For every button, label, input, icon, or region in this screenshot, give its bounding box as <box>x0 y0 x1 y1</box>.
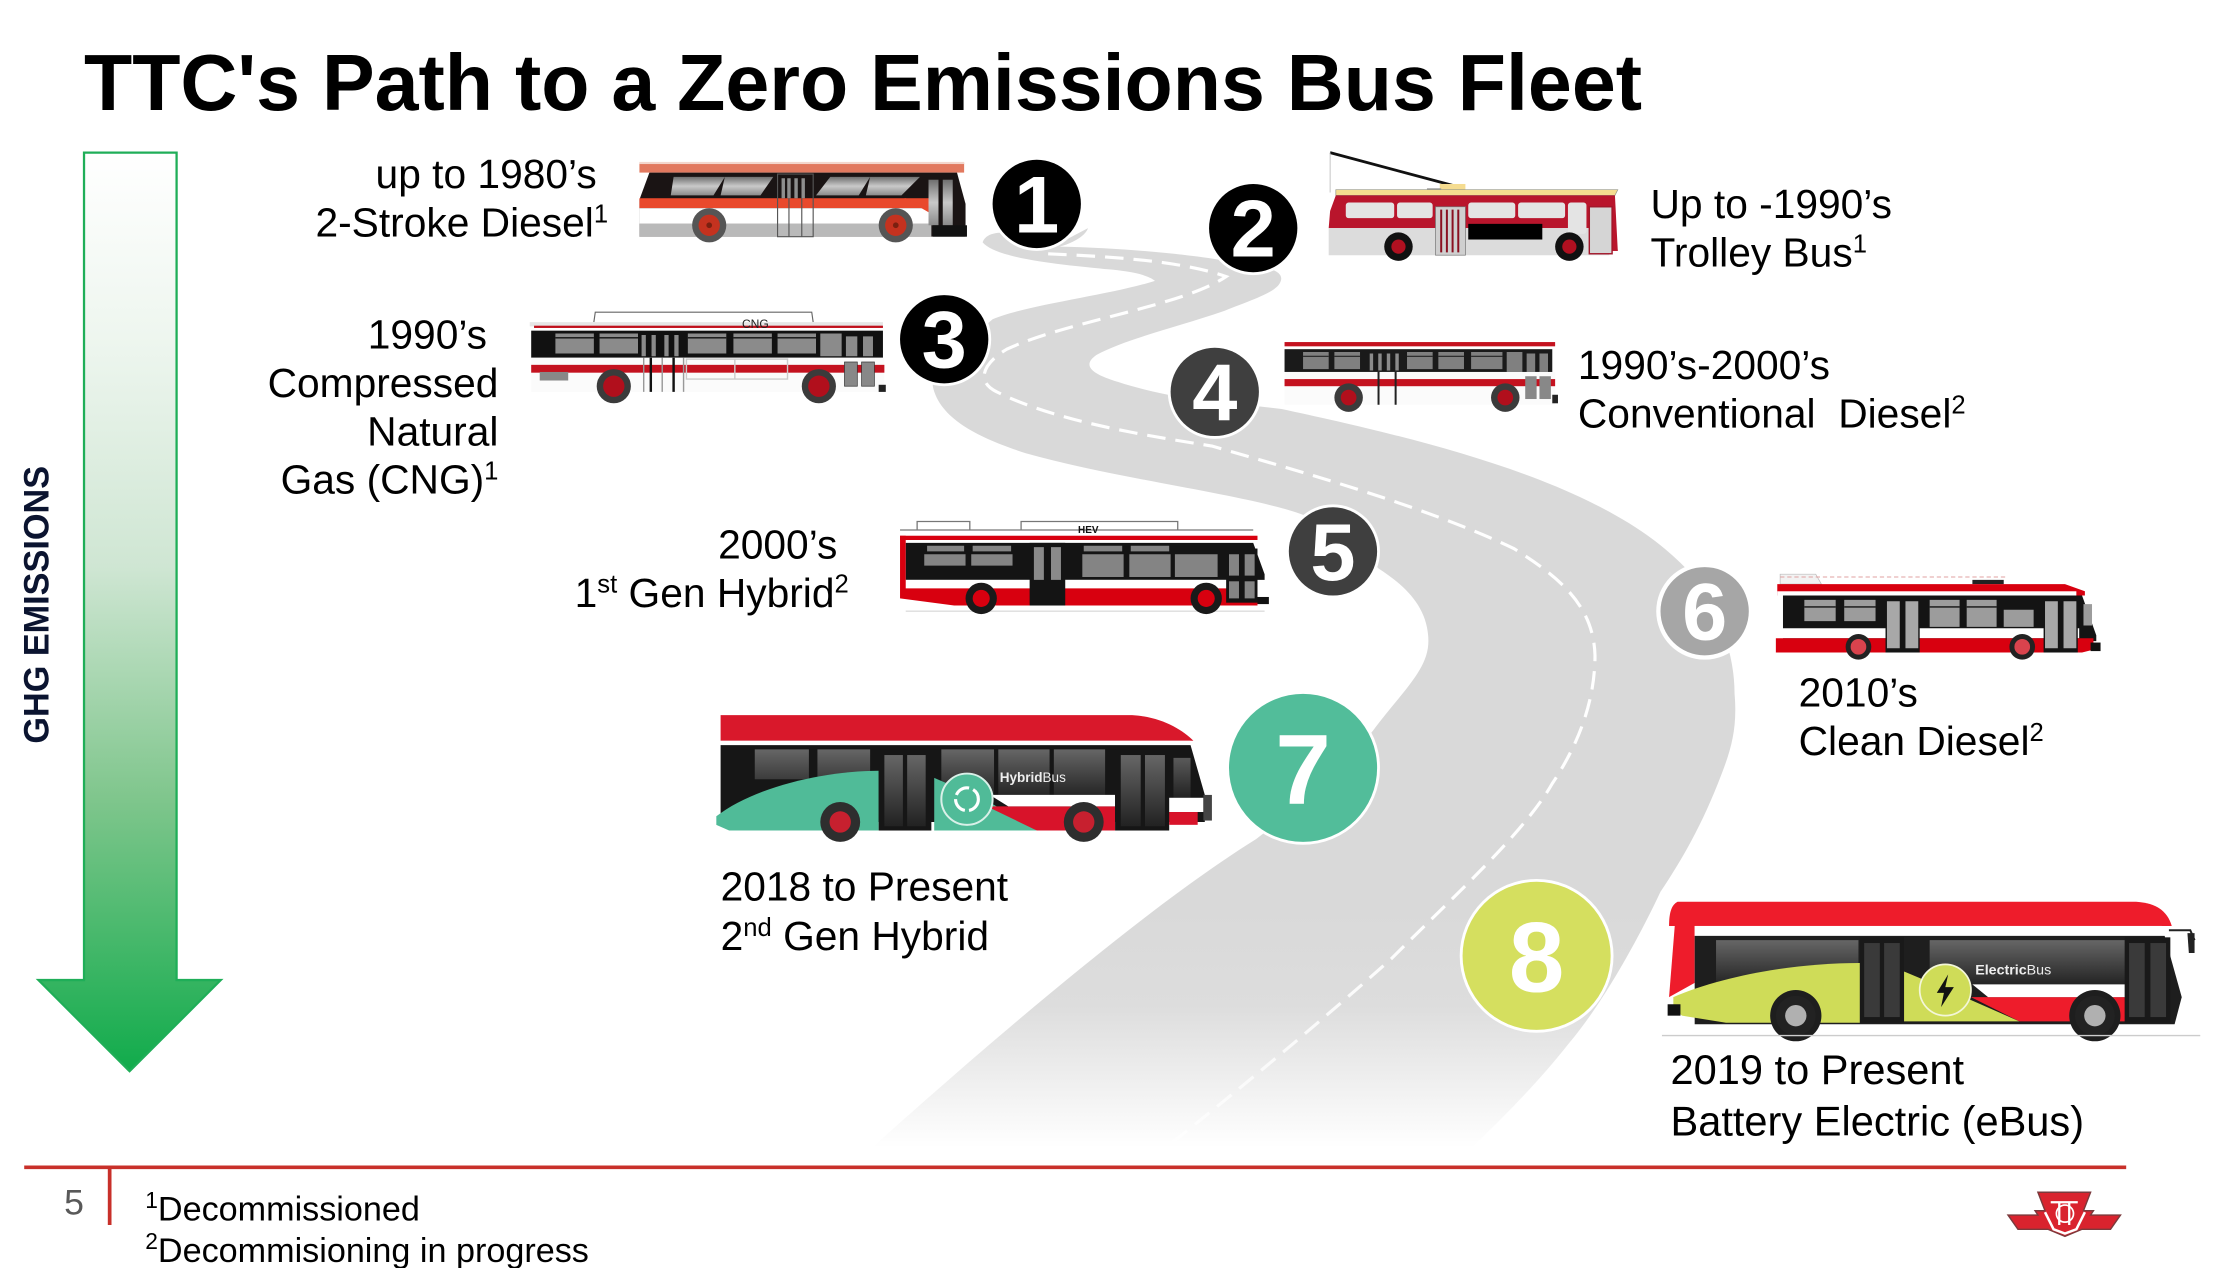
footnotes: 1 <box>145 1187 158 1213</box>
marker 5 <box>1286 504 1380 598</box>
marker 3 <box>897 292 991 386</box>
label: 1990's CNG: 1 <box>484 457 498 485</box>
marker 1 <box>990 157 1084 251</box>
marker 8 <box>1460 879 1614 1033</box>
label: 1990's-2000's conventional diesel: Conventional Diesel <box>1578 391 1951 437</box>
marker 4 <box>1168 345 1262 439</box>
footnotes: 2 <box>145 1228 158 1254</box>
vehicle wordmark: ElectricBus: ElectricBus <box>1975 962 2051 978</box>
marker 1: 1 <box>1014 160 1059 250</box>
logo: TTC <box>2008 1192 2120 1236</box>
label: 2010's clean diesel: 2 <box>2030 719 2044 747</box>
label: up to 1990's trolley <box>1651 181 1892 276</box>
label: 2019 to present battery electric <box>1670 1046 2084 1144</box>
label: 2018 to present second gen hybrid <box>721 863 1009 959</box>
label: 1990's-2000's conventional diesel <box>1578 342 1966 437</box>
bus 2: trolley bus <box>1329 153 1618 261</box>
label: up to 1980's: 2-Stroke Diesel <box>315 200 594 246</box>
label: 2000's first gen hybrid: st <box>597 571 617 599</box>
label: 2010's clean diesel: 2010’s <box>1799 670 1918 716</box>
footer rule <box>24 1167 2126 1225</box>
bus 5: first generation hybrid <box>900 521 1269 614</box>
vehicle wordmark: HybridBus: HybridBus <box>1000 770 1066 785</box>
bus 7: second generation hybrid <box>716 715 1212 842</box>
label: HEV: HEV <box>1078 525 1099 536</box>
label: 1990's-2000's conventional diesel: 1990’s-2000’s <box>1578 342 1830 388</box>
bus 1: 2-stroke diesel <box>639 162 967 242</box>
label: 1990's CNG: 1990’s <box>368 311 487 357</box>
label: up to 1990's trolley: 1 <box>1853 230 1867 258</box>
marker 4: 4 <box>1192 348 1237 438</box>
label: 2018 to present second gen hybrid: nd <box>743 914 772 942</box>
footnotes <box>145 1187 589 1268</box>
label: 2000's first gen hybrid: 2000’s <box>718 522 837 568</box>
marker 5: 5 <box>1310 508 1356 598</box>
label: 2018 to present second gen hybrid: 2 <box>721 913 743 959</box>
marker 2 <box>1206 181 1300 275</box>
label: up to 1980's <box>315 151 608 246</box>
label: 2019 to present battery electric: 2019 to Present <box>1670 1046 1964 1093</box>
axis label: GHG emissions: GHG EMISSIONS <box>17 466 56 744</box>
label: 2018 to present second gen hybrid: 2018 to Present <box>721 863 1009 909</box>
marker 3: 3 <box>922 296 967 386</box>
bus 8: battery electric <box>1661 892 2202 1043</box>
label: 2010's clean diesel: Clean Diesel <box>1799 718 2030 764</box>
label: 2000's first gen hybrid: 2 <box>835 571 849 599</box>
label: 2010's clean diesel <box>1799 670 2044 764</box>
marker 7: 7 <box>1275 714 1331 825</box>
marker 7 <box>1226 691 1380 845</box>
label: up to 1980's: up to 1980’s <box>376 151 597 197</box>
bus 6: clean diesel <box>1776 574 2101 660</box>
label: 1990's CNG <box>268 311 498 503</box>
label: 2000's first gen hybrid: Gen Hybrid <box>617 570 835 616</box>
label: 1990's CNG: Compressed <box>268 360 498 406</box>
road <box>872 228 1735 1148</box>
arrow: GHG emissions decreasing <box>38 153 221 1071</box>
label: up to 1990's trolley: Trolley Bus <box>1651 230 1853 276</box>
label: 2000's first gen hybrid <box>575 522 849 616</box>
marker 2: 2 <box>1231 185 1276 275</box>
bus 4: conventional diesel <box>1285 342 1558 412</box>
label: 2019 to present battery electric: Battery Electric (eBus) <box>1670 1097 2084 1144</box>
label: 1990's CNG: Gas (CNG) <box>281 457 484 503</box>
label: up to 1980's: 1 <box>594 200 608 228</box>
label: 1990's-2000's conventional diesel: 2 <box>1951 391 1966 419</box>
footnotes: Decommissioned <box>158 1191 420 1229</box>
marker 8: 8 <box>1509 902 1564 1013</box>
label: CNG: CNG <box>742 317 769 331</box>
label: 2000's first gen hybrid: 1 <box>575 570 597 616</box>
marker 6: 6 <box>1682 568 1727 658</box>
marker 6 <box>1656 563 1753 660</box>
label: up to 1990's trolley: Up to -1990’s <box>1651 181 1892 227</box>
icon: lightning bolt <box>1937 974 1954 1007</box>
bus 3: CNG <box>530 312 886 403</box>
title: TTC's Path to a Zero Emissions Bus Fleet <box>84 38 1642 127</box>
label: 1990's CNG: Natural <box>367 408 498 454</box>
page number: 5 <box>64 1182 84 1222</box>
label: 2018 to present second gen hybrid: Gen Hybrid <box>772 913 989 959</box>
